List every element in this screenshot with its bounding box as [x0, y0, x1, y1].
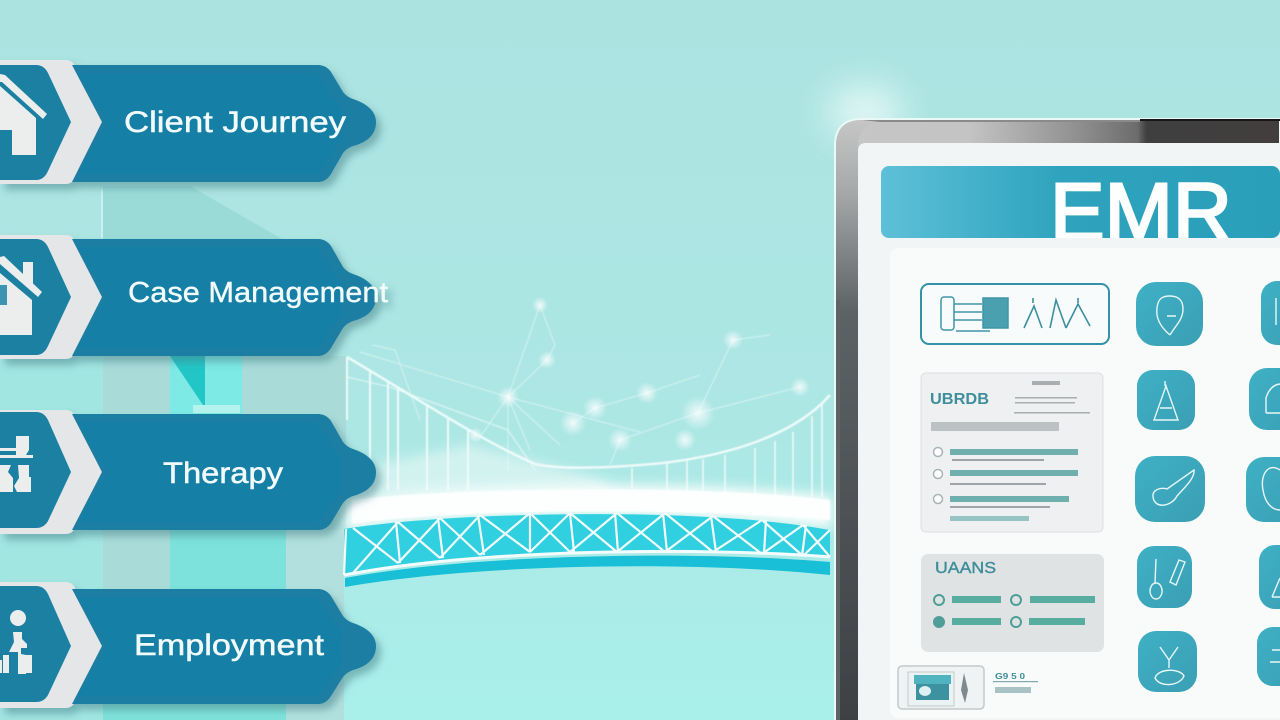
bridge illustration	[344, 297, 832, 587]
icon: house	[0, 74, 47, 155]
banner: Case Management	[0, 235, 388, 359]
thumbnail card	[898, 666, 1038, 709]
banner: Therapy	[0, 410, 376, 534]
content panel	[890, 248, 1280, 718]
suspension cables and hangers	[347, 357, 830, 497]
goals items	[952, 596, 1095, 625]
banner: Employment	[0, 582, 376, 708]
team summary box	[921, 284, 1109, 344]
tile: hands	[1138, 631, 1197, 692]
label: Therapy: Therapy	[163, 457, 283, 490]
screen	[858, 143, 1280, 720]
goals heading: UAANS	[935, 560, 996, 577]
thumbnail caption: G9 5 0	[995, 672, 1026, 681]
tile: flask	[1137, 370, 1195, 430]
background vertical bands	[0, 186, 346, 720]
label: Employment: Employment	[134, 629, 325, 662]
truss	[344, 513, 830, 587]
icon: three people	[1024, 298, 1090, 328]
icon: person and bars	[0, 610, 32, 674]
tile: shield (cropped)	[1261, 281, 1280, 345]
icon: therapy desk	[0, 436, 33, 492]
EMR header bar	[881, 166, 1280, 238]
network lines	[360, 305, 800, 470]
bezel	[835, 119, 1280, 720]
label: Client Journey: Client Journey	[124, 106, 346, 139]
tile: lines (cropped)	[1257, 627, 1280, 686]
tile: arm	[1135, 456, 1205, 522]
record list lines	[931, 422, 1078, 521]
goals card	[921, 554, 1104, 652]
tile: curve (cropped)	[1246, 457, 1280, 522]
icon: house with chimney	[0, 256, 42, 335]
white deck	[345, 485, 832, 530]
header lines	[1014, 381, 1090, 414]
card heading: UBRDB	[930, 391, 989, 408]
tile: tools	[1137, 546, 1192, 608]
glowing nodes	[467, 297, 810, 452]
icon: equipment	[941, 297, 1008, 331]
tile: dome (cropped)	[1249, 368, 1280, 430]
glow behind tablet	[827, 86, 903, 138]
tile: triangle (cropped)	[1259, 545, 1280, 609]
haze behind deck	[346, 445, 620, 495]
tablet device	[835, 119, 1280, 720]
record card	[921, 373, 1103, 532]
label: Case Management: Case Management	[128, 277, 388, 309]
tile: speech pin	[1136, 282, 1203, 346]
lower chord	[345, 556, 830, 587]
banner: Client Journey	[0, 60, 376, 184]
EMR header bar: EMR	[1050, 167, 1232, 258]
